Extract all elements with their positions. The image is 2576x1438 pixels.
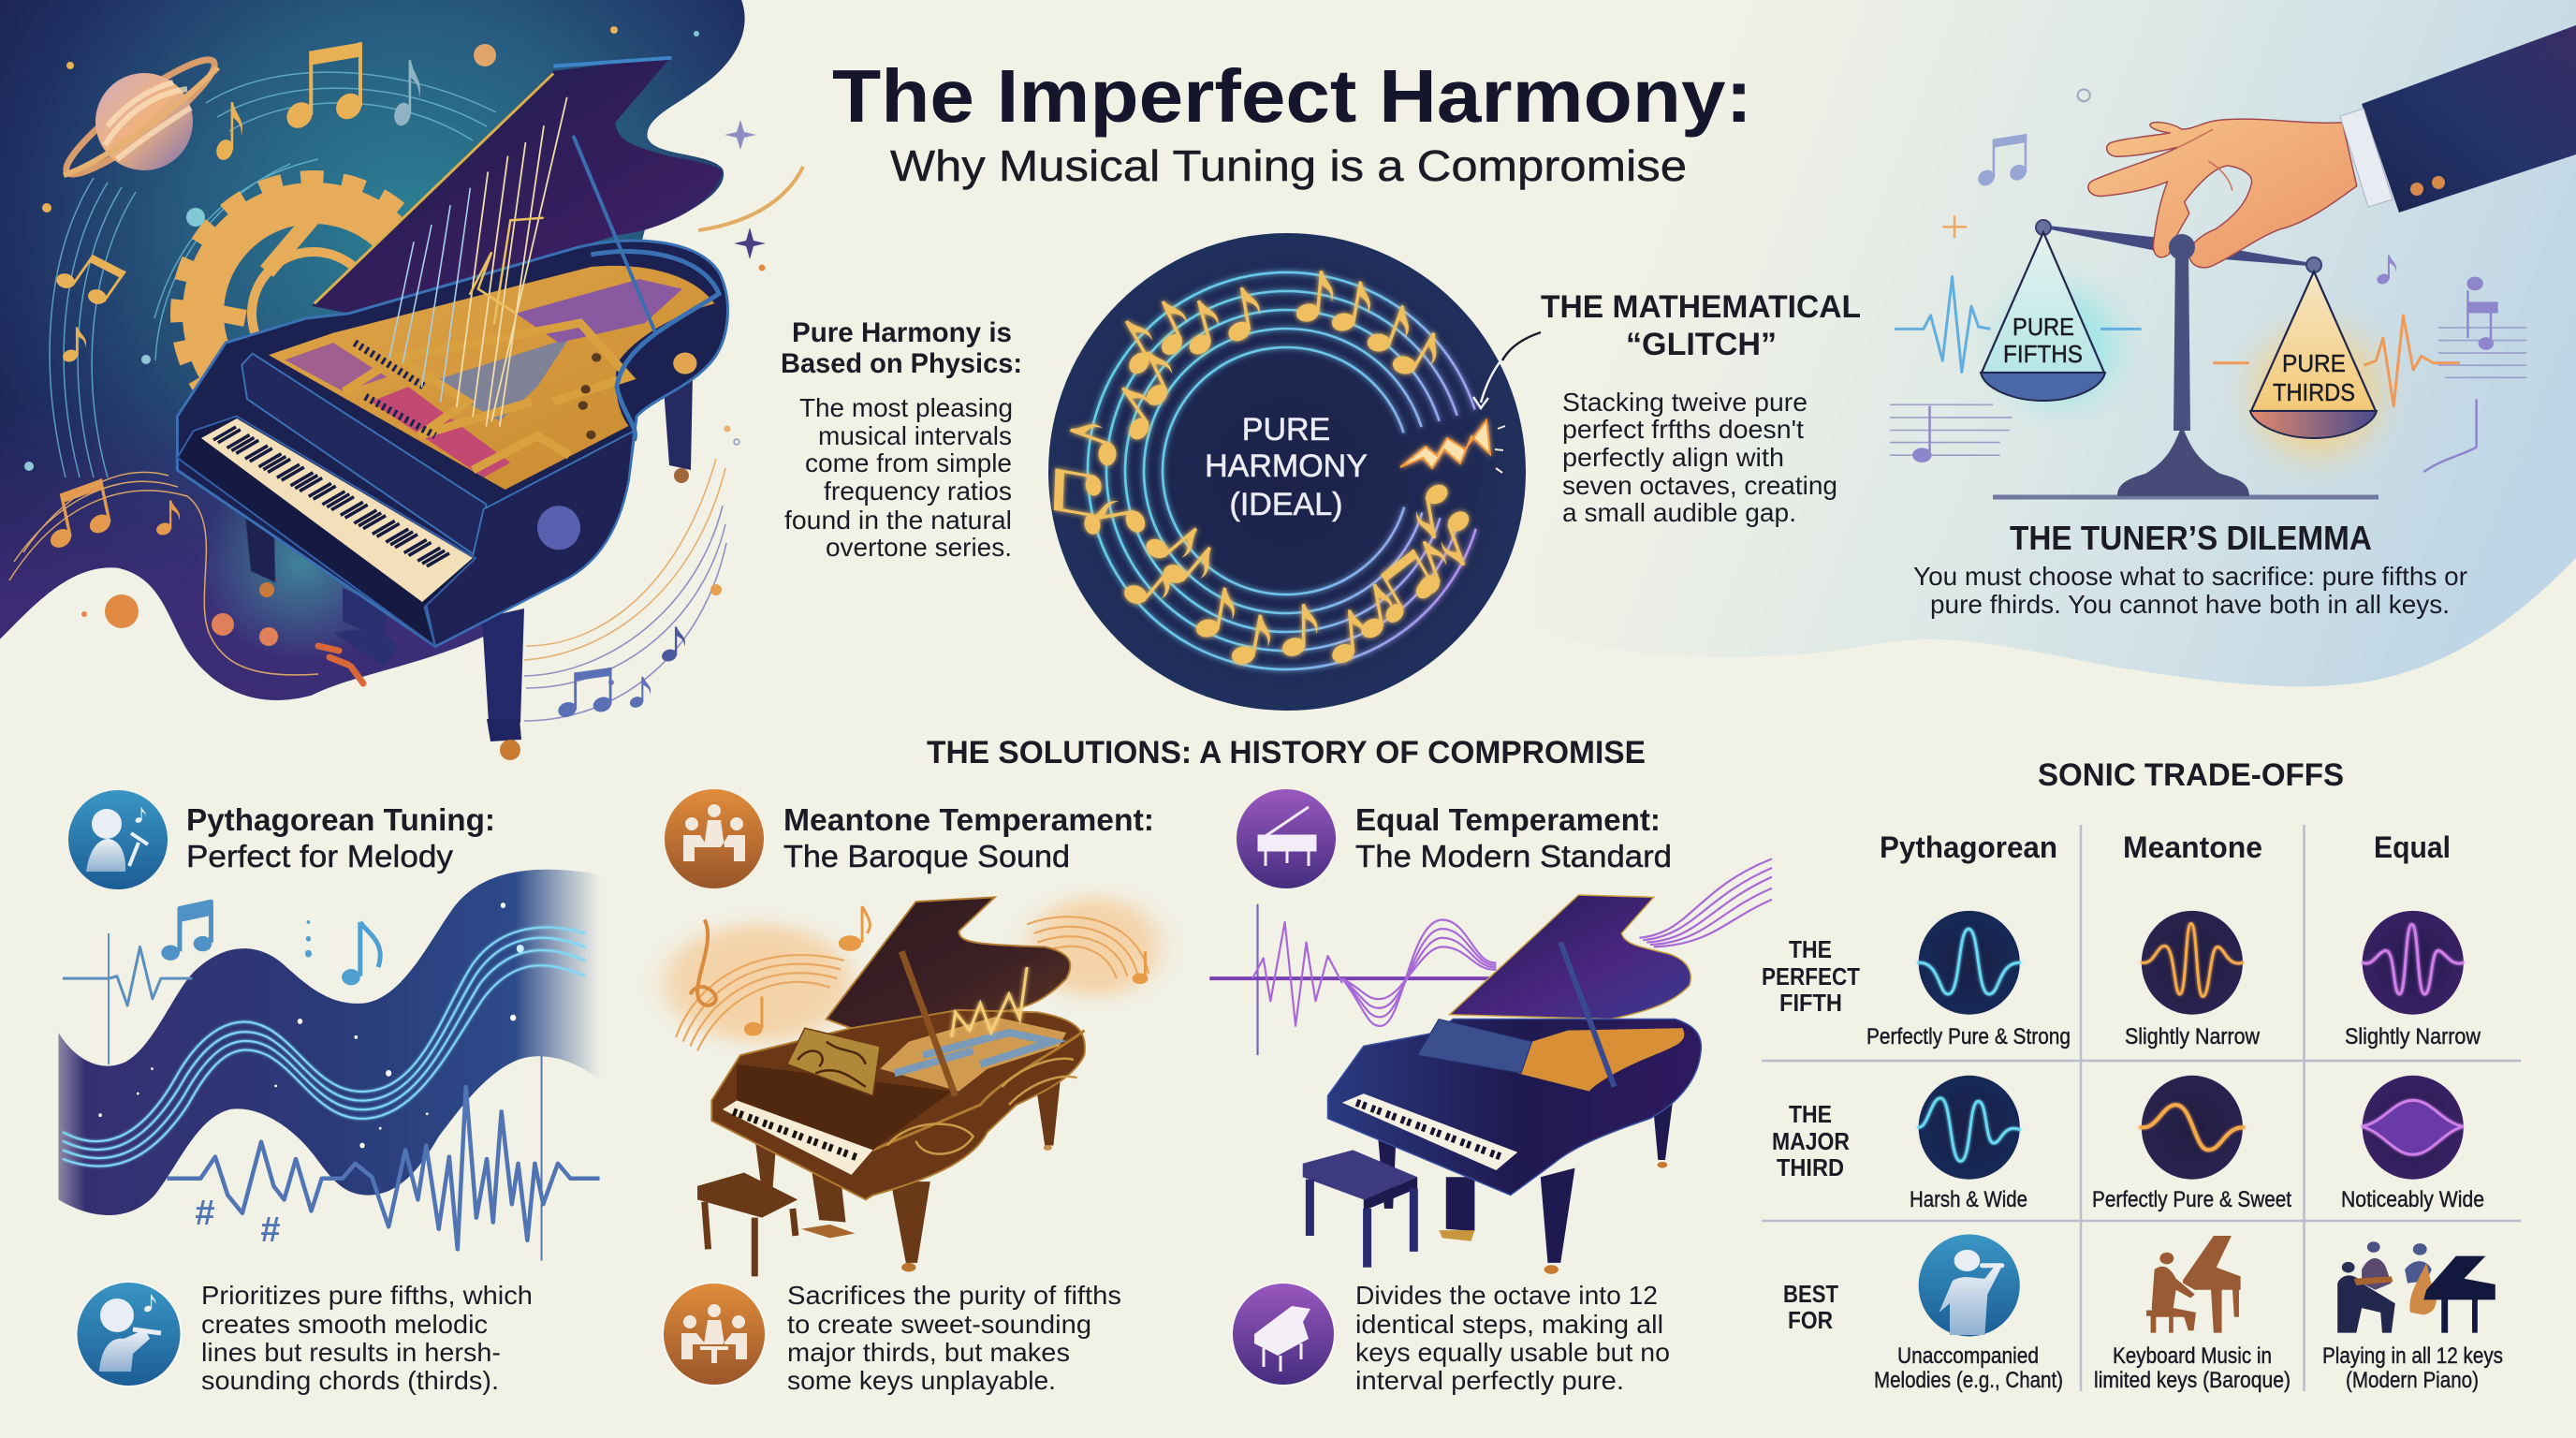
text block: pure harmony is based on physics [781, 317, 1022, 562]
right pan: pure thirds [2250, 271, 2377, 438]
keys [1342, 1093, 1517, 1170]
body text [201, 1281, 533, 1395]
text block: the tuner's dilemma: pure fhirds. You cannot have both in all keys. [1930, 590, 2450, 619]
text block: the mathematical glitch: a small audible gap. [1562, 498, 1796, 527]
cell captions: Noticeably Wide [2341, 1187, 2484, 1212]
row labels: PERFECT [1762, 962, 1860, 990]
body text: keys equally usable but no [1355, 1338, 1670, 1367]
keys [723, 1100, 873, 1175]
pivot [2169, 234, 2195, 260]
icon: singer [68, 790, 168, 889]
icon: solo singer [1919, 1235, 2020, 1336]
clean wave and notes [63, 902, 542, 1260]
text block: the mathematical glitch: Stacking tweive pure [1562, 388, 1808, 417]
suit sleeve [2340, 25, 2576, 213]
pan glows [2001, 288, 2380, 457]
table title: SONIC TRADE-OFFS [2038, 757, 2344, 793]
stars [98, 902, 524, 1148]
case [711, 1010, 1085, 1199]
right pan: pure thirds: THIRDS [2273, 378, 2355, 406]
text block: pure harmony is based on physics: found in the natural [784, 506, 1012, 535]
scale beam, post and base [1993, 220, 2378, 497]
curved staff with notes at lower right of piano [524, 459, 726, 721]
harsh waveform [168, 1087, 600, 1249]
heading: Equal Temperament: [1355, 802, 1661, 837]
cell captions [1866, 1024, 2503, 1393]
planet with ring [56, 47, 225, 187]
cosmic background blob [0, 0, 745, 700]
text block: pure harmony is based on physics: overtone series. [826, 533, 1012, 562]
cell captions: Perfectly Pure & Strong [1866, 1024, 2071, 1049]
cell captions: limited keys (Baroque) [2094, 1368, 2291, 1393]
wave icon grid [1919, 911, 2496, 1336]
body text: major thirds, but makes [787, 1338, 1070, 1367]
text block: pure harmony is based on physics: Pure Harmony is [792, 317, 1012, 348]
icon: seated ensemble [663, 1283, 766, 1386]
section heading: the solutions: THE SOLUTIONS: A HISTORY OF COMPROMISE [927, 735, 1646, 770]
row labels: THE [1789, 1100, 1832, 1128]
background wash: top right blue region [1535, 0, 2576, 686]
heading [783, 802, 1154, 873]
centre label: PURE [1242, 412, 1330, 448]
arrow: glitch callout pointer [1473, 332, 1541, 408]
row labels: MAJOR [1772, 1127, 1850, 1155]
left pan: pure fifths: FIFTHS [2003, 340, 2083, 368]
body text: Sacrifices the purity of fifths [787, 1281, 1121, 1310]
centre label [1205, 412, 1368, 522]
cosmic band [58, 870, 602, 1215]
cell captions: Harsh & Wide [1910, 1187, 2027, 1212]
golden waveform [952, 967, 1027, 1037]
panel: equal temperament [1209, 789, 1772, 1395]
piano interior [269, 252, 719, 490]
icon: keyboard player [2146, 1236, 2241, 1333]
icon: piano [1232, 1283, 1335, 1386]
sparkles and accent swoosh [608, 120, 803, 685]
lid [827, 897, 1070, 1028]
floating gold and teal notes [24, 26, 699, 646]
heading: The Modern Standard [1355, 839, 1672, 873]
gear [180, 180, 447, 448]
notes [745, 906, 1147, 1034]
glowing staff lines [63, 928, 585, 1167]
illustration: cosmic grand piano [0, 0, 803, 760]
text block: the mathematical glitch: perfect frfths doesn't [1562, 415, 1804, 444]
heading: Pythagorean Tuning: [186, 802, 495, 837]
case [1328, 1020, 1701, 1196]
prop stick and strings [389, 98, 655, 426]
title [832, 54, 1752, 190]
illustration: baroque piano [666, 897, 1160, 1276]
panel: meantone temperament [663, 789, 1160, 1395]
text block: pure harmony is based on physics: Based on Physics: [781, 348, 1022, 379]
illustration: modern piano [1209, 858, 1772, 1274]
right pan: pure thirds: PURE [2282, 349, 2346, 377]
front corner panel [424, 431, 634, 646]
gold staff at lower left [9, 472, 318, 675]
sharp signs [195, 1194, 281, 1250]
column headers: Meantone [2123, 830, 2262, 864]
row labels: FOR [1788, 1306, 1833, 1334]
cell captions: Playing in all 12 keys [2322, 1343, 2503, 1369]
lid [1450, 895, 1690, 1020]
cell captions: Keyboard Music in [2113, 1343, 2272, 1369]
staff rings [1038, 223, 1534, 719]
panel: pythagorean tuning [58, 790, 602, 1395]
row labels: THIRD [1777, 1153, 1844, 1181]
music desk [1417, 1020, 1532, 1073]
body text: to create sweet-sounding [787, 1310, 1091, 1339]
illustration: tuner's scale and hand [1890, 25, 2576, 497]
body text [787, 1281, 1121, 1395]
panel: sonic trade-offs table [1762, 757, 2521, 1393]
legs [754, 1078, 1061, 1272]
interior [737, 1017, 1084, 1150]
heading: Meantone Temperament: [783, 802, 1154, 837]
warm glow and staff [666, 897, 1160, 1050]
column headers [1880, 830, 2451, 864]
centre label: (IDEAL) [1230, 487, 1342, 522]
wave: meantone third [2141, 1076, 2244, 1180]
text block: the tuner's dilemma [1913, 519, 2467, 619]
heading [1355, 802, 1672, 873]
body text: creates smooth melodic [201, 1310, 488, 1339]
column headers: Equal [2374, 830, 2451, 864]
text block: the mathematical glitch: “GLITCH” [1626, 327, 1777, 362]
heading [186, 802, 495, 873]
body text: lines but results in hersh- [201, 1338, 501, 1367]
sharp signs: # [195, 1194, 215, 1233]
dark disc [1048, 233, 1526, 711]
icon: ensemble with piano [2337, 1241, 2496, 1333]
piano legs and pedals [245, 374, 693, 760]
text block: pure harmony is based on physics: The most pleasing [799, 393, 1013, 422]
text block: the tuner's dilemma: THE TUNER’S DILEMMA [2010, 519, 2372, 557]
icon: chamber group [665, 789, 764, 888]
grand piano drawing [177, 56, 727, 646]
text block: pure harmony is based on physics: come from simple [805, 448, 1012, 477]
interior [1517, 1028, 1684, 1092]
text block: the mathematical glitch [1541, 289, 1861, 527]
pure harmony circle [1038, 223, 1534, 719]
text block: pure harmony is based on physics: frequency ratios [824, 477, 1012, 506]
wave: pythagorean third [1919, 1076, 2020, 1180]
text block: pure harmony is based on physics: musical intervals [818, 421, 1012, 450]
text block: the mathematical glitch: seven octaves, creating [1562, 471, 1837, 500]
wave: pythagorean fifth [1919, 911, 2020, 1015]
prop [1560, 943, 1615, 1087]
heading: The Baroque Sound [783, 839, 1070, 873]
left pan: pure fifths: PURE [2012, 313, 2074, 341]
bench [1303, 1150, 1417, 1268]
text block: the tuner's dilemma: You must choose what to sacrifice: pure fifths or [1913, 562, 2467, 591]
row labels [1762, 935, 1860, 1334]
cell captions: Melodies (e.g., Chant) [1874, 1368, 2063, 1393]
glitch spark [1400, 420, 1505, 473]
text block: the mathematical glitch: THE MATHEMATICAL [1541, 289, 1861, 325]
heading: Perfect for Melody [186, 839, 454, 873]
music desk [787, 1028, 880, 1096]
wave: equal third [2362, 1076, 2464, 1180]
curved staff lines around the gear [50, 72, 496, 477]
body text: Prioritizes pure fifths, which [201, 1281, 533, 1310]
centre label: HARMONY [1205, 448, 1368, 484]
fallboard [242, 354, 486, 556]
icon: person with microphone [77, 1282, 182, 1387]
cell captions: (Modern Piano) [2346, 1368, 2479, 1393]
left pan: pure fifths [1981, 232, 2105, 401]
prop stick [901, 951, 956, 1096]
ring of gold notes [1045, 269, 1486, 671]
subtitle: Why Musical Tuning is a Compromise [890, 141, 1687, 190]
icon: piano badge [1237, 789, 1336, 888]
piano lid [312, 56, 723, 314]
body text: some keys unplayable. [787, 1366, 1056, 1395]
row labels: BEST [1783, 1280, 1838, 1308]
purple waveform [1209, 858, 1772, 1055]
column headers: Pythagorean [1880, 830, 2057, 864]
body text [1355, 1281, 1670, 1395]
body text: identical steps, making all [1355, 1310, 1663, 1339]
heartbeat waves and notes [1890, 89, 2526, 472]
sharp signs: # [260, 1211, 281, 1250]
piano case [177, 241, 727, 646]
wave: equal fifth [2363, 911, 2464, 1015]
hand [2088, 119, 2357, 268]
body text: Divides the octave into 12 [1355, 1281, 1658, 1310]
body text: sounding chords (thirds). [201, 1366, 499, 1395]
bench [697, 1172, 798, 1276]
keyboard keys [201, 418, 473, 602]
cell captions: Slightly Narrow [2125, 1024, 2261, 1049]
wave: meantone fifth [2142, 911, 2243, 1015]
cell captions: Slightly Narrow [2345, 1024, 2481, 1049]
cell captions: Perfectly Pure & Sweet [2092, 1187, 2291, 1212]
side scrollwork [887, 1059, 1077, 1154]
title: The Imperfect Harmony: [832, 54, 1752, 138]
keyboard bed [177, 417, 476, 646]
row labels: THE [1789, 935, 1832, 963]
cell captions: Unaccompanied [1897, 1343, 2039, 1369]
text block: the mathematical glitch: perfectly align with [1562, 443, 1784, 472]
row labels: FIFTH [1779, 989, 1842, 1017]
legs [1378, 1082, 1676, 1274]
wave illustration [58, 870, 602, 1260]
body text: interval perfectly pure. [1355, 1366, 1624, 1395]
